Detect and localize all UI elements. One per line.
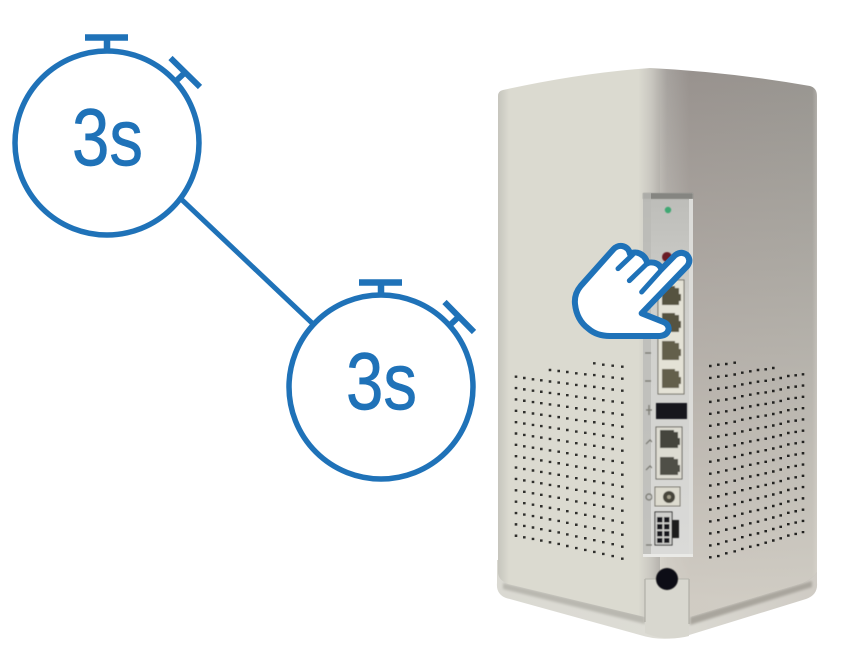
phone ports <box>656 427 682 479</box>
finger creases <box>618 255 661 292</box>
base centre block <box>645 579 689 638</box>
rear port panel <box>643 193 693 557</box>
side button <box>170 58 200 87</box>
status LED <box>665 207 671 213</box>
router body <box>498 68 817 617</box>
red reset button <box>662 252 672 262</box>
ethernet ports <box>658 280 684 394</box>
USB port <box>656 403 687 419</box>
black knob <box>656 568 678 590</box>
stopwatch dial <box>289 295 473 479</box>
speaker grille left <box>516 362 622 560</box>
speaker grille right <box>710 362 803 558</box>
top crown <box>85 38 128 50</box>
router photo <box>497 68 817 639</box>
connecting line <box>180 198 312 323</box>
top crown <box>359 282 402 295</box>
hand outline <box>575 246 689 336</box>
port icons <box>645 353 652 545</box>
molex connector <box>655 512 679 545</box>
power jack <box>655 487 680 506</box>
label 3s: 3s <box>72 93 143 183</box>
stopwatch 2 <box>289 282 474 479</box>
router base lip <box>497 560 817 639</box>
side button <box>444 302 474 332</box>
stopwatch dial <box>15 51 199 235</box>
icon: pointing hand <box>575 246 689 336</box>
stopwatch 1 <box>15 38 200 235</box>
label 3s: 3s <box>346 337 417 427</box>
